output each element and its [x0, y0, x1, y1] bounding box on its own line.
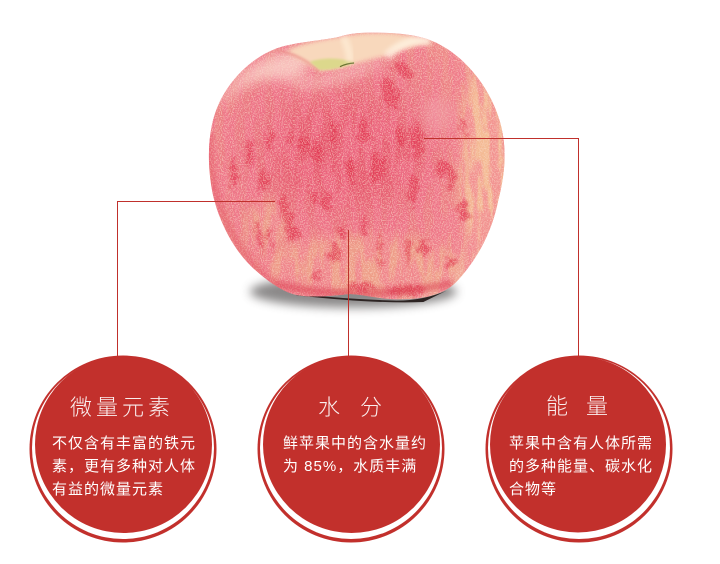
text: trace elements	[52, 435, 196, 498]
top highlight	[220, 50, 309, 107]
heading: water: 水分	[318, 395, 402, 420]
cast shadow	[250, 276, 457, 308]
text: energy: 苹果中含有人体所需	[509, 435, 653, 452]
badge circle: water	[258, 356, 444, 542]
badge circle: energy	[486, 356, 672, 542]
text: trace elements: 不仅含有丰富的铁元	[52, 435, 196, 452]
text: energy: 合物等	[509, 481, 557, 498]
stem cavity	[287, 32, 433, 71]
text: energy	[509, 435, 653, 498]
text: energy: 的多种能量、碳水化	[509, 458, 653, 475]
panel: water	[258, 356, 444, 542]
text: water	[283, 435, 427, 475]
heading: trace elements: 微量元素	[70, 395, 174, 420]
text: water: 鲜苹果中的含水量约	[283, 435, 427, 452]
text: trace elements: 素，更有多种对人体	[52, 458, 196, 475]
panel: trace elements	[30, 356, 216, 542]
illustration: apple with shadow	[208, 32, 505, 314]
text: trace elements: 有益的微量元素	[52, 481, 164, 498]
panel: energy	[486, 356, 672, 542]
badge circle: trace elements	[30, 356, 216, 542]
heading: energy: 能量	[546, 394, 626, 419]
red streaks	[231, 58, 469, 295]
text: water: 为 85%，水质丰满	[283, 458, 417, 475]
peach side and lower tones	[454, 72, 504, 252]
rim darkening	[210, 133, 273, 283]
